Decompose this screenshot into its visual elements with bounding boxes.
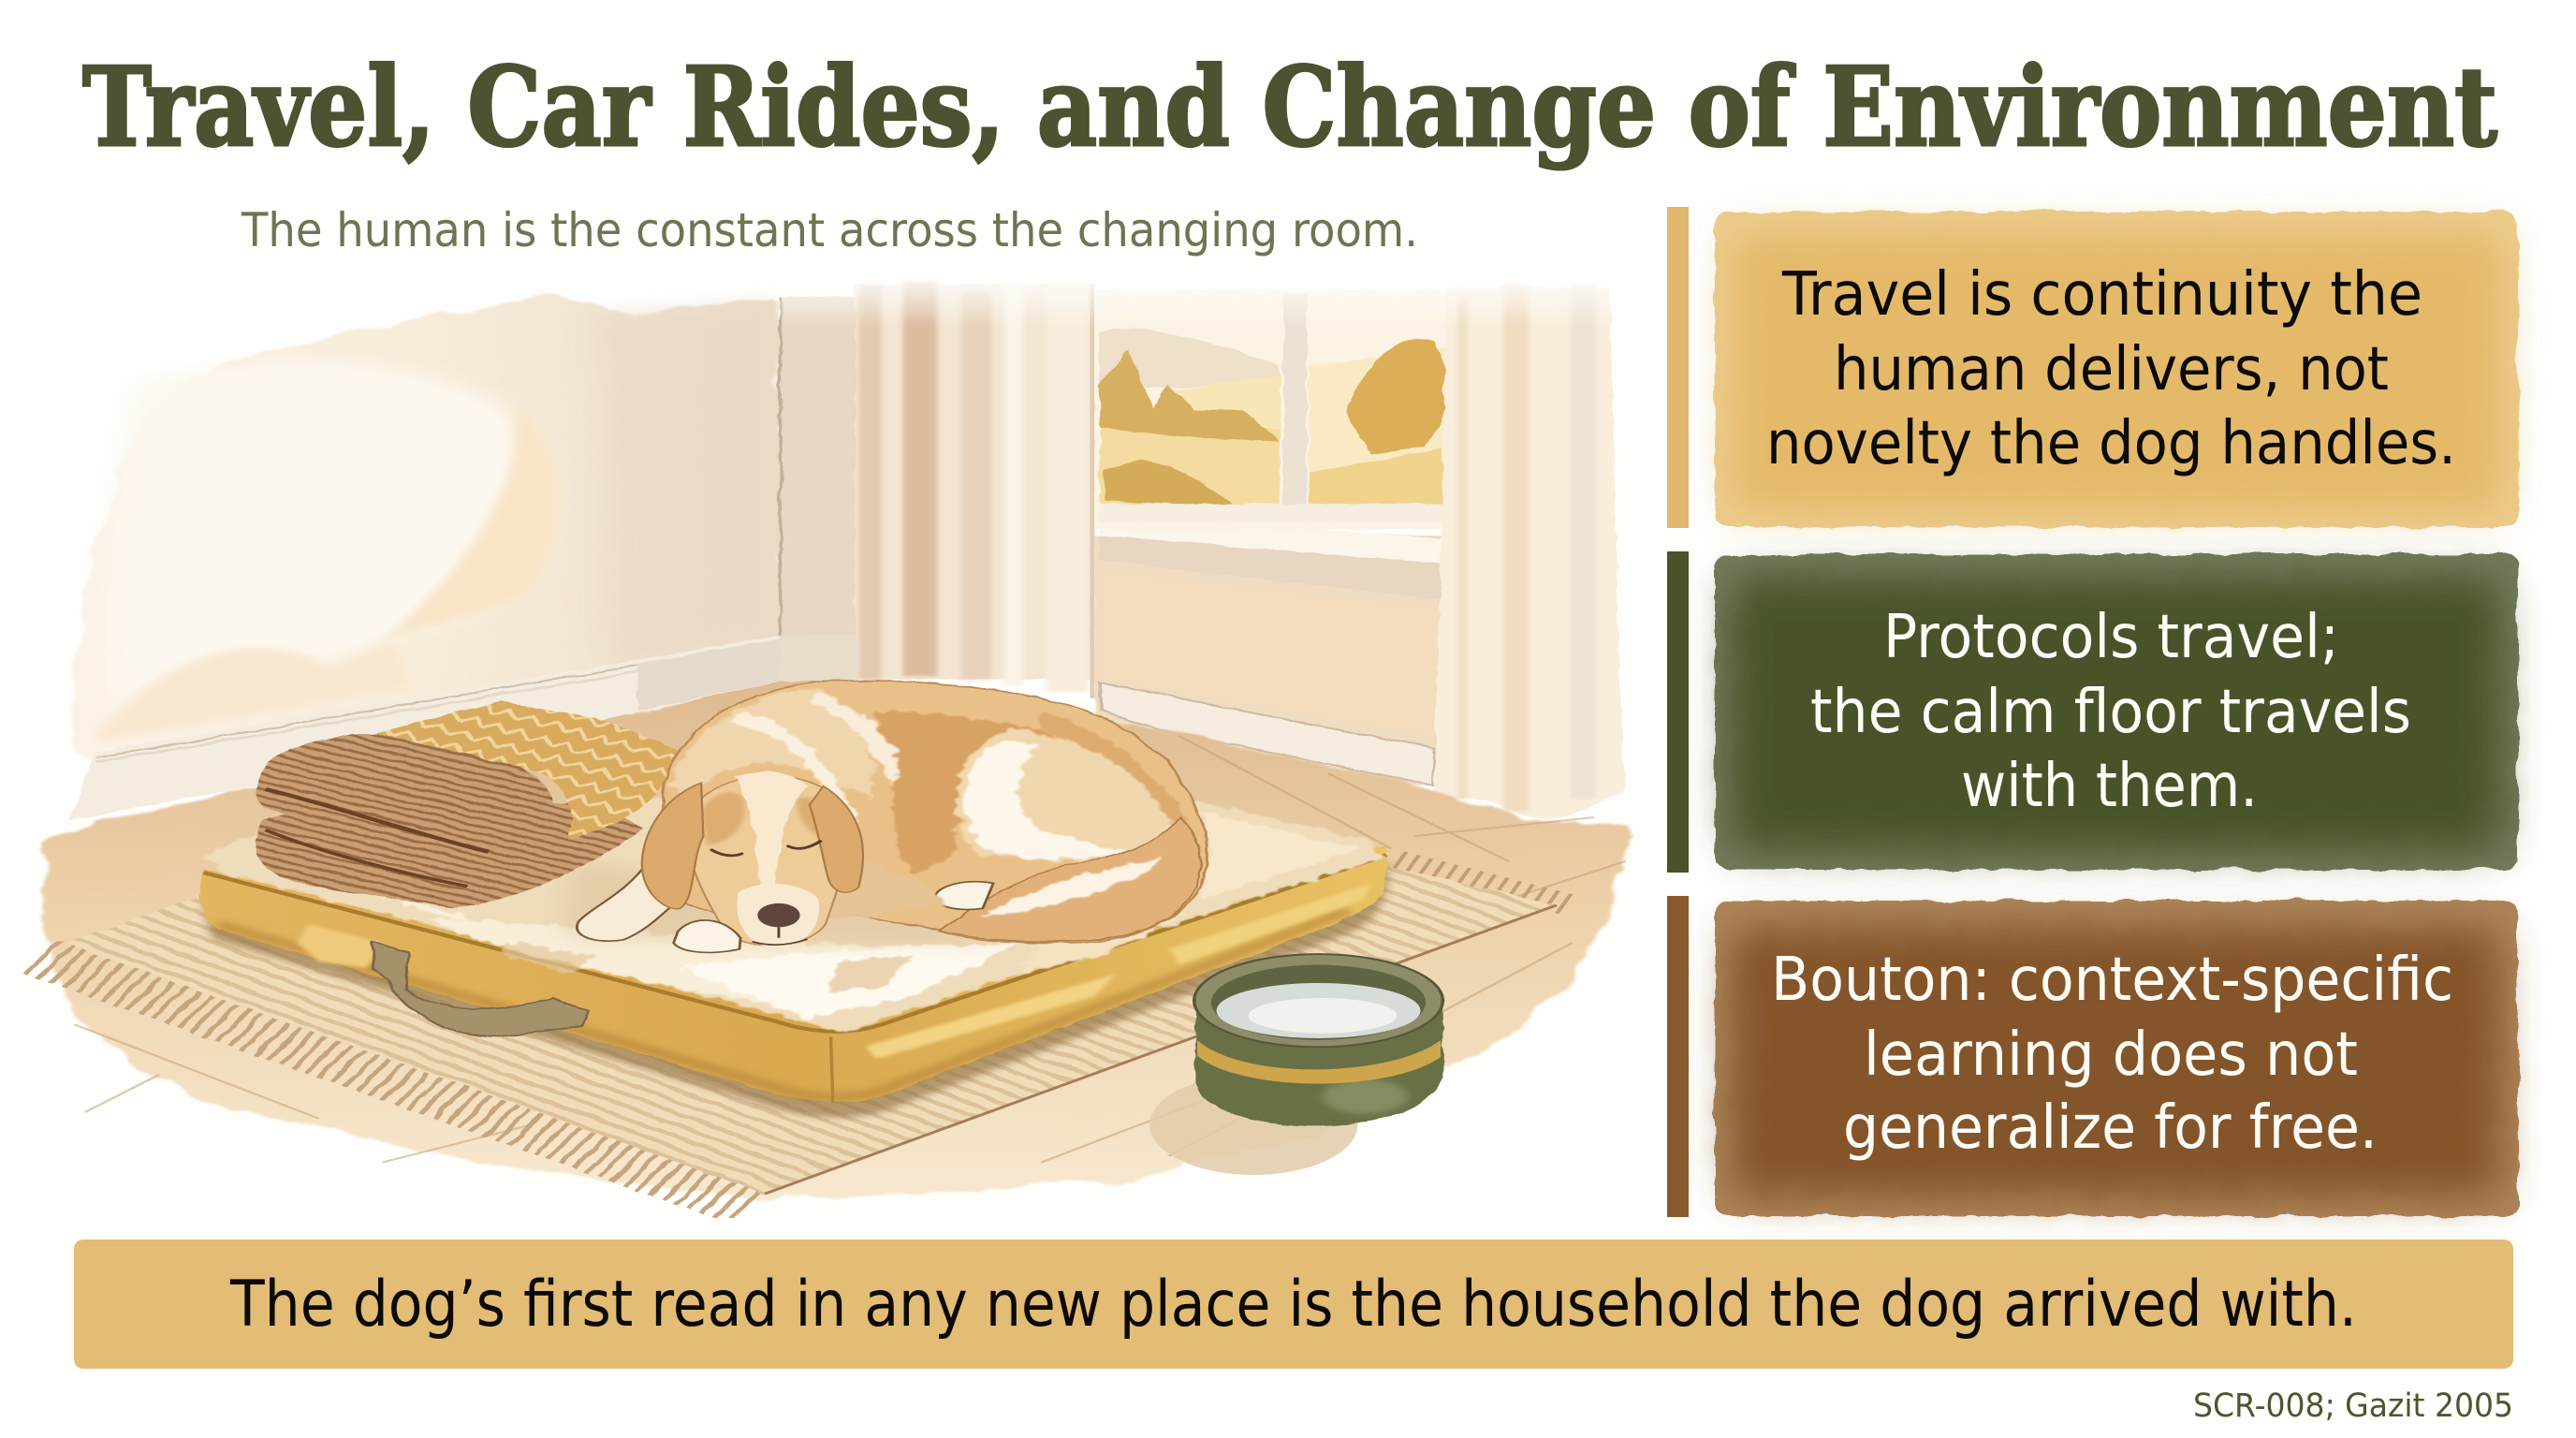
subtitle: The human is the constant across the changing room. (241, 203, 1418, 257)
bowl inner (1211, 965, 1426, 1040)
card: protocols travel (1715, 554, 2518, 870)
illustration: dog sleeping on travel bed (42, 271, 1631, 1205)
bed (199, 845, 1388, 1118)
dog right ear (810, 786, 863, 892)
banner text: The dog’s first read in any new place is the household the dog arrived with. (229, 1268, 2357, 1342)
water bowl (1149, 954, 1442, 1175)
dog brow shading (701, 792, 829, 845)
card 1 text: Travel is continuity the (1781, 260, 2422, 330)
card: travel is continuity (1715, 212, 2518, 527)
dog chest fur (812, 861, 945, 921)
dog front leg and paw (577, 861, 680, 941)
bowl rim (1194, 954, 1442, 1047)
bowl gold band (1197, 1040, 1441, 1084)
card 3 text: Bouton: context-specific (1771, 946, 2453, 1015)
dog light shoulder stripes (733, 711, 860, 836)
card 1 text: novelty the dog handles. (1766, 409, 2456, 478)
card 2 text: the calm floor travels (1810, 678, 2411, 747)
right curtain (1434, 285, 1623, 819)
dog mane (669, 687, 874, 799)
bowl light wash (1323, 1078, 1408, 1114)
card 3 text: learning does not (1864, 1020, 2358, 1090)
card 2 text: with them. (1961, 752, 2258, 821)
right wall and corner (779, 297, 1487, 786)
card 3 wash (1715, 901, 2518, 1216)
bowl body (1195, 999, 1442, 1126)
dog tail highlight (983, 858, 1164, 917)
bowl water (1217, 983, 1420, 1038)
folded blanket (255, 701, 678, 908)
dog body shading (871, 711, 1062, 873)
dog shoulder stripe 2 (808, 692, 898, 786)
source citation: SCR-008; Gazit 2005 (2193, 1387, 2513, 1425)
card 1 wash (1715, 212, 2518, 527)
dog blaze (733, 772, 808, 887)
dog muzzle (737, 884, 819, 947)
dog haunch (957, 730, 1174, 861)
window with autumn landscape (1094, 290, 1456, 529)
card 1 text (1766, 260, 2456, 478)
accent bar: travel (1667, 207, 1689, 528)
card 1 text: human delivers, not (1834, 335, 2389, 404)
dog back wash (1041, 711, 1201, 861)
wall wash (74, 294, 786, 761)
takeaway banner (74, 1240, 2513, 1369)
skirting board (69, 636, 857, 820)
bowl shadow (1149, 1075, 1358, 1175)
dog rear paw (935, 882, 993, 909)
dog head (686, 776, 847, 946)
dog eyes (711, 842, 820, 856)
dog mouth (753, 927, 808, 945)
card 3 text (1771, 946, 2453, 1163)
card 2 text (1810, 603, 2411, 821)
dog body (659, 681, 1207, 943)
left curtain (856, 281, 1094, 698)
bed handle (372, 943, 590, 1037)
fleece bed top (207, 799, 1383, 1032)
card 3 text: generalize for free. (1843, 1093, 2378, 1163)
accent bar: bouton (1667, 896, 1689, 1217)
dog haunch highlight (965, 741, 1126, 858)
sleeping dog (577, 681, 1207, 952)
dog left ear (642, 783, 703, 909)
card: bouton (1715, 901, 2518, 1216)
floor plank lines (74, 736, 1626, 1163)
accent bar: protocols (1667, 551, 1689, 873)
card 2 text: Protocols travel; (1883, 603, 2339, 672)
card 2 wash (1715, 554, 2518, 870)
banner background (74, 1240, 2513, 1369)
dog second paw (674, 920, 740, 952)
top fade of curtains (781, 271, 1631, 328)
dog tail (940, 817, 1201, 942)
floor (42, 681, 1631, 1200)
rug (42, 861, 1571, 1205)
dog nose (757, 903, 800, 927)
